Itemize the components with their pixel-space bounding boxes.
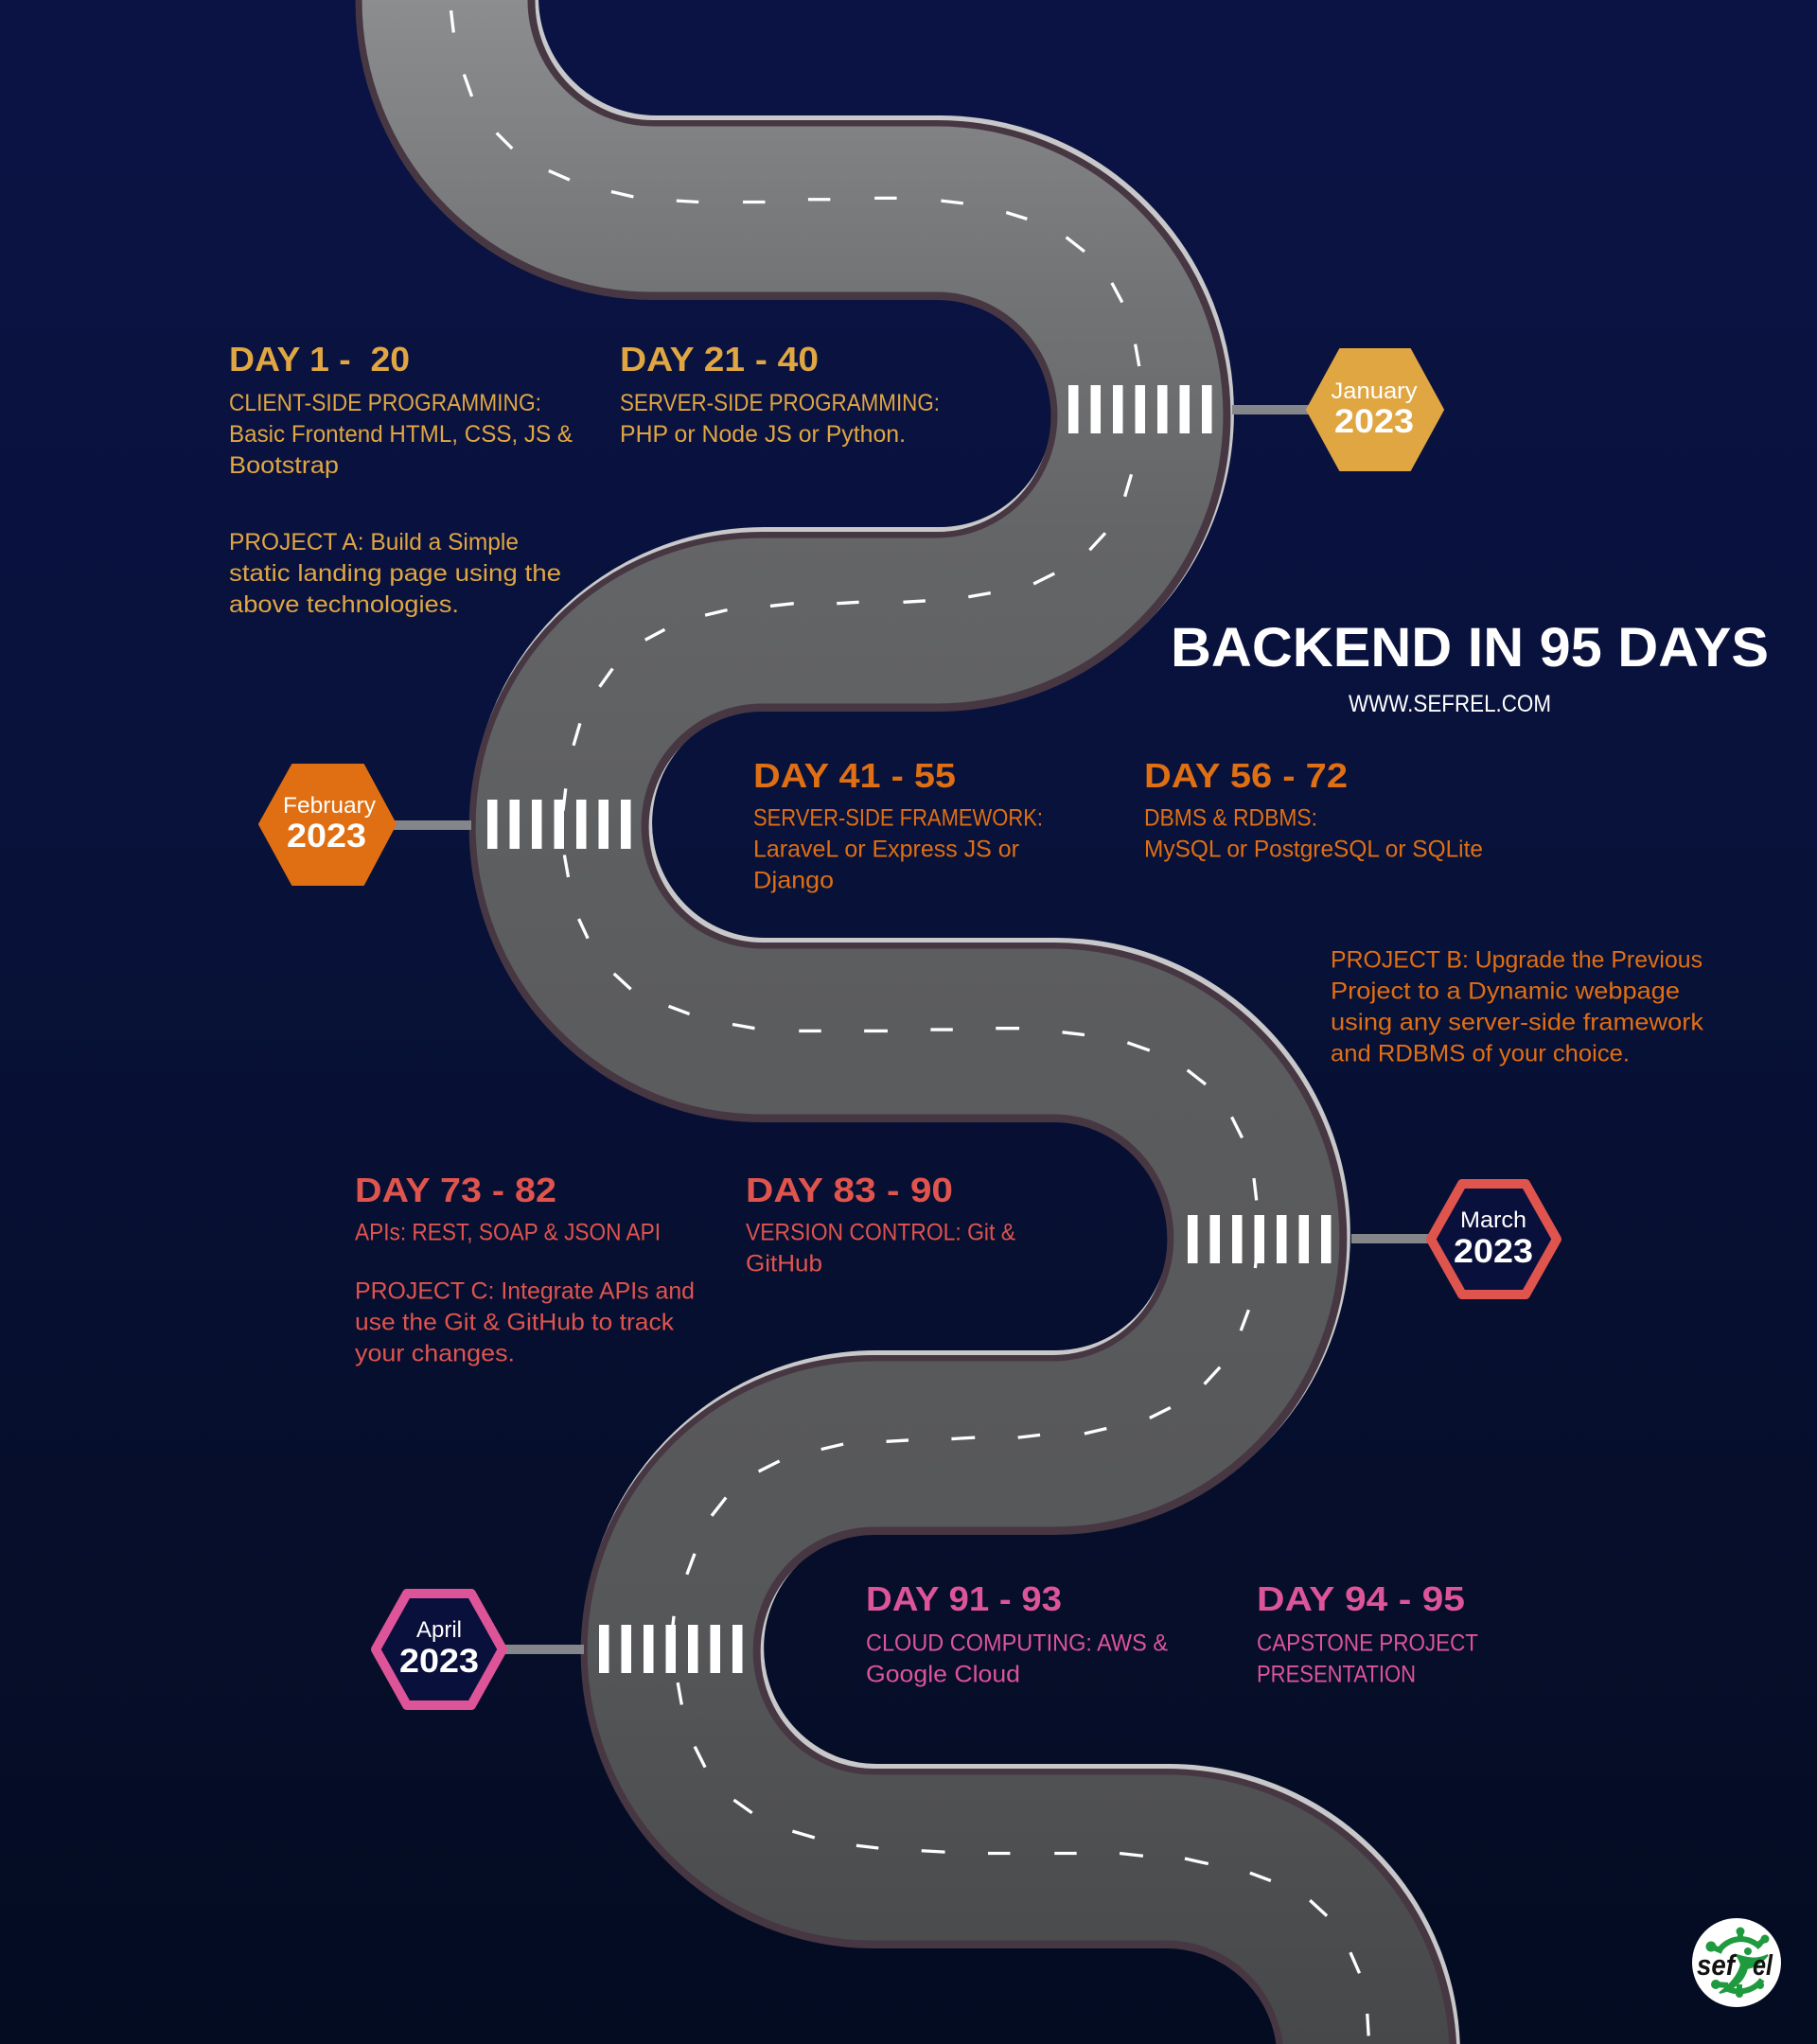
text block: project B: using any server-side framework: [1331, 1009, 1704, 1035]
winding road: [445, 0, 1369, 2044]
icon: sefrel logo: sef: [1697, 1948, 1737, 1982]
milestone: February 2023: [259, 765, 396, 885]
text block: day 73-82: [355, 1171, 695, 1366]
milestone: March 2023: [1431, 1184, 1557, 1295]
text block: day 73-82: DAY 73 - 82: [355, 1171, 556, 1209]
text block: day 83-90: GitHub: [746, 1250, 822, 1277]
milestone: April 2023: April: [416, 1617, 462, 1643]
text block: project B: PROJECT B: Upgrade the Previous: [1331, 946, 1702, 973]
text block: day 1-20: DAY 1 - 20: [229, 340, 410, 379]
milestone: January 2023: 2023: [1334, 403, 1414, 440]
text block: day 94-95: CAPSTONE PROJECT: [1257, 1630, 1478, 1656]
text block: day 41-55: Django: [753, 867, 834, 893]
text block: day 41-55: SERVER-SIDE FRAMEWORK:: [753, 804, 1043, 831]
text block: day 41-55: DAY 41 - 55: [753, 756, 956, 795]
text block: day 91-93: DAY 91 - 93: [866, 1579, 1062, 1618]
text block: day 83-90: DAY 83 - 90: [746, 1171, 953, 1209]
text block: day 41-55: [753, 756, 1043, 893]
connector: April: [504, 1645, 584, 1654]
text block: day 1-20: above technologies.: [229, 591, 459, 618]
icon: sefrel logo: el: [1753, 1948, 1773, 1982]
text block: project B: Project to a Dynamic webpage: [1331, 978, 1680, 1004]
text block: day 1-20: static landing page using the: [229, 560, 561, 587]
text block: day 1-20: CLIENT-SIDE PROGRAMMING:: [229, 390, 541, 416]
text block: day 73-82: your changes.: [355, 1340, 515, 1366]
text block: day 21-40: PHP or Node JS or Python.: [620, 421, 906, 448]
text block: day 73-82: PROJECT C: Integrate APIs and: [355, 1278, 695, 1304]
connector: February: [393, 820, 471, 830]
text block: day 21-40: SERVER-SIDE PROGRAMMING:: [620, 390, 940, 416]
text block: project B: [1331, 946, 1704, 1066]
text block: day 21-40: DAY 21 - 40: [620, 340, 819, 379]
text block: day 83-90: VERSION CONTROL: Git &: [746, 1219, 1015, 1245]
text block: day 94-95: [1257, 1579, 1478, 1687]
website url: WWW.SEFREL.COM: [1349, 691, 1551, 717]
connector: January: [1232, 405, 1310, 414]
text block: day 56-72: [1144, 756, 1483, 862]
text block: day 56-72: DAY 56 - 72: [1144, 756, 1348, 795]
connector: March: [1351, 1234, 1429, 1243]
text block: day 1-20: Bootstrap: [229, 452, 339, 479]
crosswalk: March: [1188, 1215, 1331, 1263]
milestone: January 2023: January: [1331, 379, 1418, 404]
crosswalk: April: [599, 1625, 742, 1673]
milestone: March 2023: 2023: [1454, 1233, 1533, 1270]
text block: day 91-93: [866, 1579, 1168, 1687]
title: BACKEND IN 95 DAYS: [1171, 617, 1769, 678]
milestone: January 2023: [1307, 349, 1443, 470]
text block: day 41-55: LaraveL or Express JS or: [753, 836, 1019, 862]
milestone: February 2023: February: [283, 793, 376, 819]
milestone: March 2023: March: [1460, 1207, 1526, 1233]
text block: day 94-95: DAY 94 - 95: [1257, 1579, 1465, 1618]
icon: sefrel logo: [1692, 1918, 1781, 2007]
road centre dashes: [451, 10, 1368, 2035]
text block: day 56-72: DBMS & RDBMS:: [1144, 804, 1317, 831]
text block: day 73-82: use the Git & GitHub to track: [355, 1309, 675, 1335]
text block: day 91-93: Google Cloud: [866, 1661, 1020, 1687]
logo figure: [1720, 1955, 1768, 1993]
text block: day 21-40: [620, 340, 940, 448]
text block: day 1-20: [229, 340, 573, 618]
text block: day 94-95: PRESENTATION: [1257, 1661, 1416, 1687]
milestone: April 2023: 2023: [399, 1643, 479, 1680]
text block: day 1-20: PROJECT A: Build a Simple: [229, 529, 519, 555]
text block: project B: and RDBMS of your choice.: [1331, 1040, 1630, 1066]
text block: day 73-82: APIs: REST, SOAP & JSON API: [355, 1219, 661, 1245]
milestone: April 2023: [376, 1594, 503, 1705]
milestone: February 2023: 2023: [287, 818, 366, 855]
text block: day 56-72: MySQL or PostgreSQL or SQLite: [1144, 836, 1483, 862]
text block: day 91-93: CLOUD COMPUTING: AWS &: [866, 1630, 1168, 1656]
text block: day 83-90: [746, 1171, 1015, 1277]
crosswalk: February: [487, 800, 630, 849]
text block: day 1-20: Basic Frontend HTML, CSS, JS &: [229, 421, 573, 448]
crosswalk: January: [1068, 385, 1211, 433]
